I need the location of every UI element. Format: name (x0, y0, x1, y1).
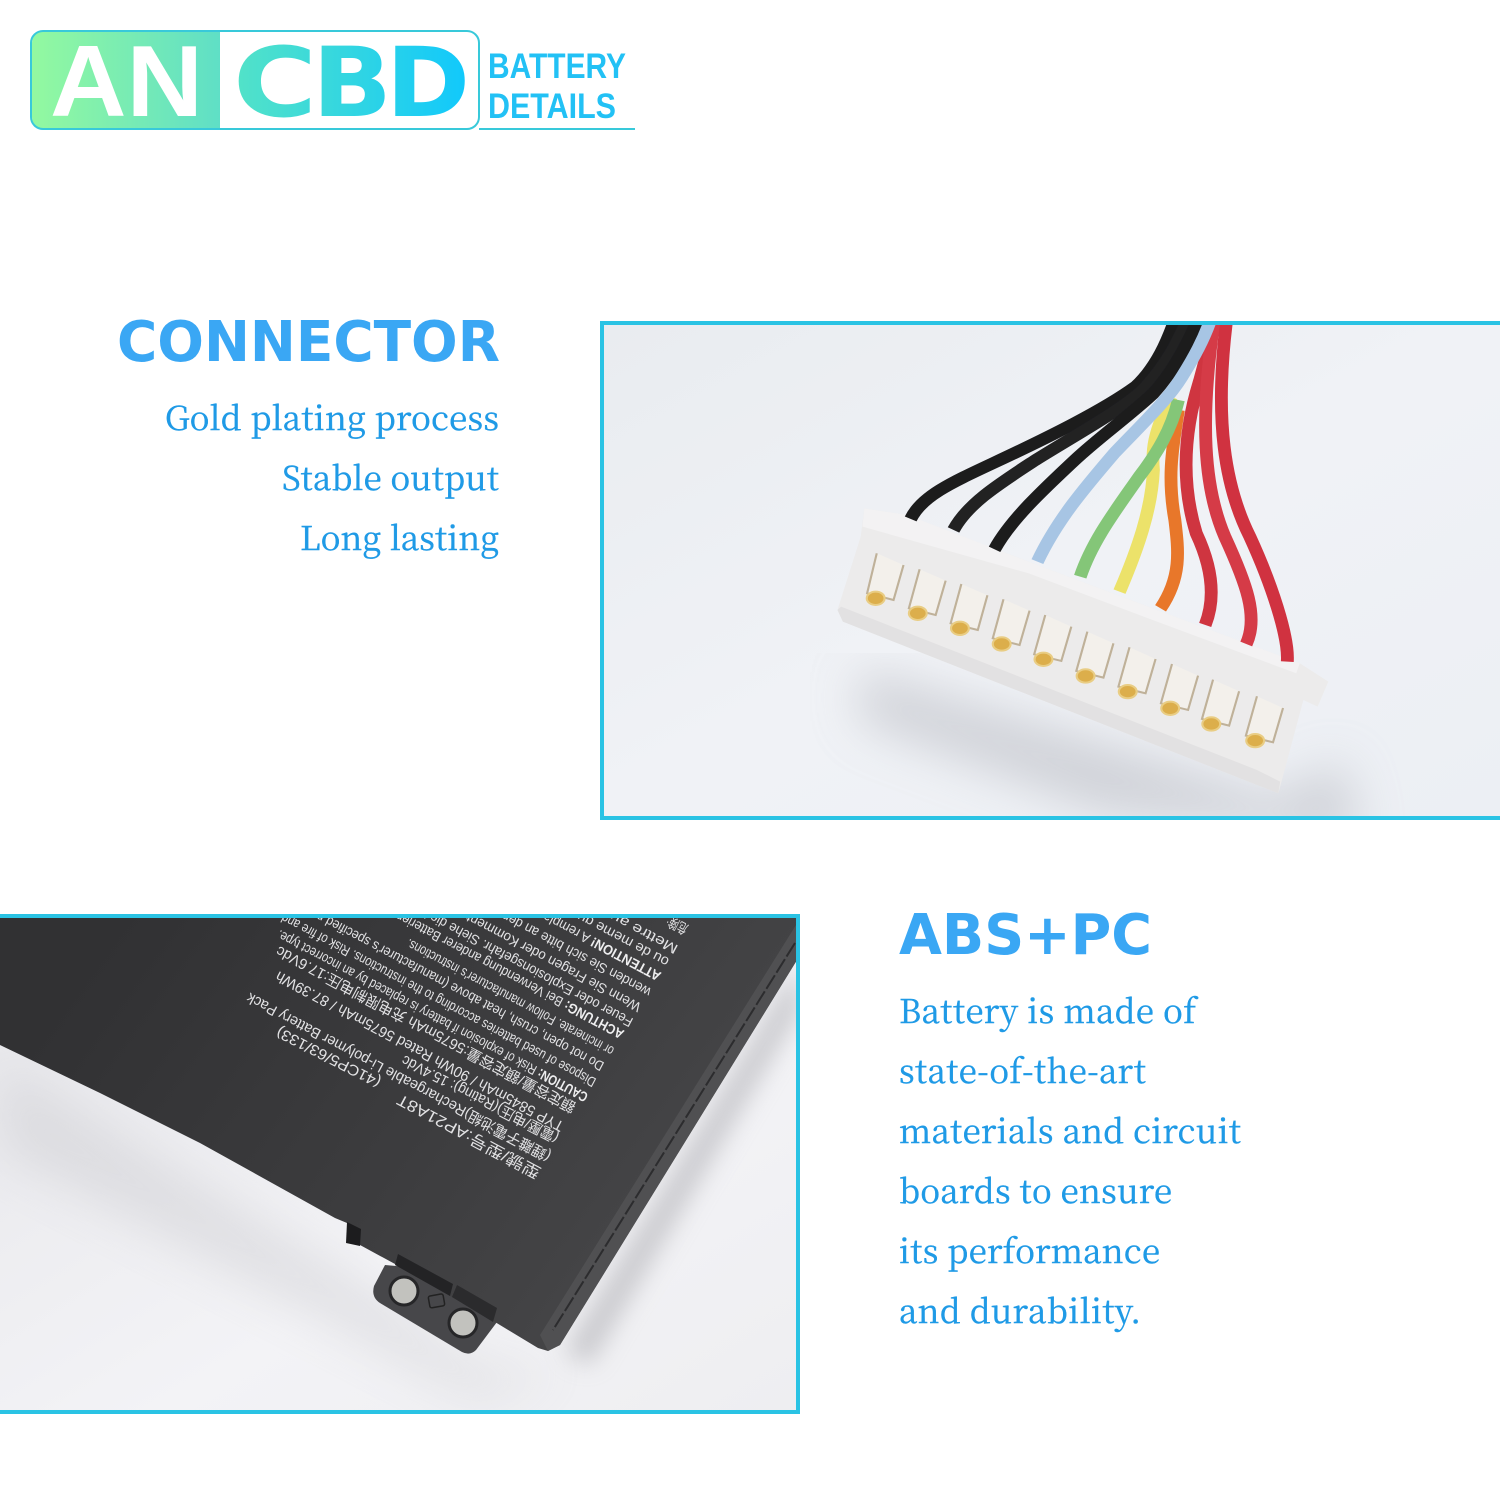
battery panel border (0, 916, 798, 1412)
logo: CBD letters (233, 27, 470, 139)
battery label text: Dispose of used batteries according to the instructions. Risk of fire and (278, 910, 598, 1090)
abs+pc description: state-of-the-art (899, 1046, 1146, 1093)
battery label text: (鋰離子電池組)Rechargeable Li-polymer Battery Pack (243, 989, 554, 1165)
battery label text: ou de meme qualite ou type (505, 872, 671, 970)
connector gold contacts (867, 592, 1264, 747)
connector shadow (860, 670, 1360, 840)
battery label text: ATTENTION! A remplacer uniquement (462, 867, 663, 984)
connector feature list: Long lasting (300, 513, 499, 560)
logo: underline (479, 128, 635, 130)
logo: battery details label (488, 47, 626, 126)
panel: battery photo (0, 867, 800, 1412)
logo: outline (31, 31, 479, 129)
battery tab (373, 1265, 497, 1354)
battery label text: or incinerate. Follow manufacturer's instructions. (403, 936, 616, 1059)
heading: abs+pc: ABS+PC (899, 903, 1152, 968)
connector pin slots (867, 553, 1283, 742)
connector feature list: Stable output (282, 453, 499, 500)
text block: connector (117, 310, 500, 560)
battery label text: wenden Sie sich bitte an den Kundendienst (425, 869, 654, 1001)
battery label text: Mettre au rebut (567, 887, 680, 957)
logo: CBD letters: C (233, 27, 317, 139)
logo: battery details label: BATTERY (488, 47, 626, 86)
logo: CBD letters: D (386, 27, 470, 139)
battery label text: 額定容量/額定容量:5675mAh 充电限制电压:17.6Vdc (273, 942, 579, 1115)
connector housing (837, 508, 1328, 793)
battery label text: ACHTUNG: Bei Verwendung anderer Batterien besteht (354, 887, 626, 1042)
battery label text: 危険: (663, 913, 690, 937)
battery body (0, 918, 797, 1351)
connector wires (911, 320, 1287, 662)
battery label text: Do not open, crush, heat above (manufacturer's specified maximum (272, 887, 606, 1074)
battery label text (246, 918, 689, 1180)
logo: battery details label: DETAILS (488, 87, 616, 126)
battery label text: (電壓/电压)(Rating): 15.4Vdc (399, 1051, 562, 1146)
abs+pc description: materials and circuit (899, 1106, 1241, 1153)
abs+pc description: and durability. (899, 1286, 1141, 1333)
abs+pc description: its performance (899, 1226, 1160, 1273)
abs+pc description (899, 986, 1241, 1333)
logo: AN badge (32, 31, 220, 129)
battery label text: Wenn Sie Fragen oder Kommentare an den Co (388, 870, 643, 1015)
connector feature list: Gold plating process (165, 393, 499, 440)
heading: connector: CONNECTOR (117, 310, 500, 375)
abs+pc description: boards to ensure (899, 1166, 1172, 1213)
battery label text: CAUTION: Risk of explosion if battery is replaced by an incorrect type. (274, 927, 590, 1105)
battery label text: Feuer oder Explosionsgefahr. Siehe die Vorschriften (363, 876, 635, 1030)
logo (31, 26, 635, 139)
battery shadows (0, 965, 800, 1400)
battery edge rim (540, 925, 797, 1351)
battery label text: TYP 5845mAh / 90Wh Rated 5675mAh / 87.39Wh (273, 967, 567, 1134)
panel: connector photo (602, 320, 1500, 840)
connector feature list (165, 393, 499, 560)
logo: CBD letters: B (312, 27, 392, 139)
logo: AN letters: AN (50, 26, 203, 138)
text block: abs+pc (899, 903, 1241, 1333)
battery label text: (41CP5/63/133) (274, 1023, 384, 1091)
battery label text: 型號/型号:AP21A8T (394, 1090, 544, 1181)
abs+pc description: Battery is made of (899, 986, 1199, 1033)
battery edge groove (553, 943, 795, 1330)
